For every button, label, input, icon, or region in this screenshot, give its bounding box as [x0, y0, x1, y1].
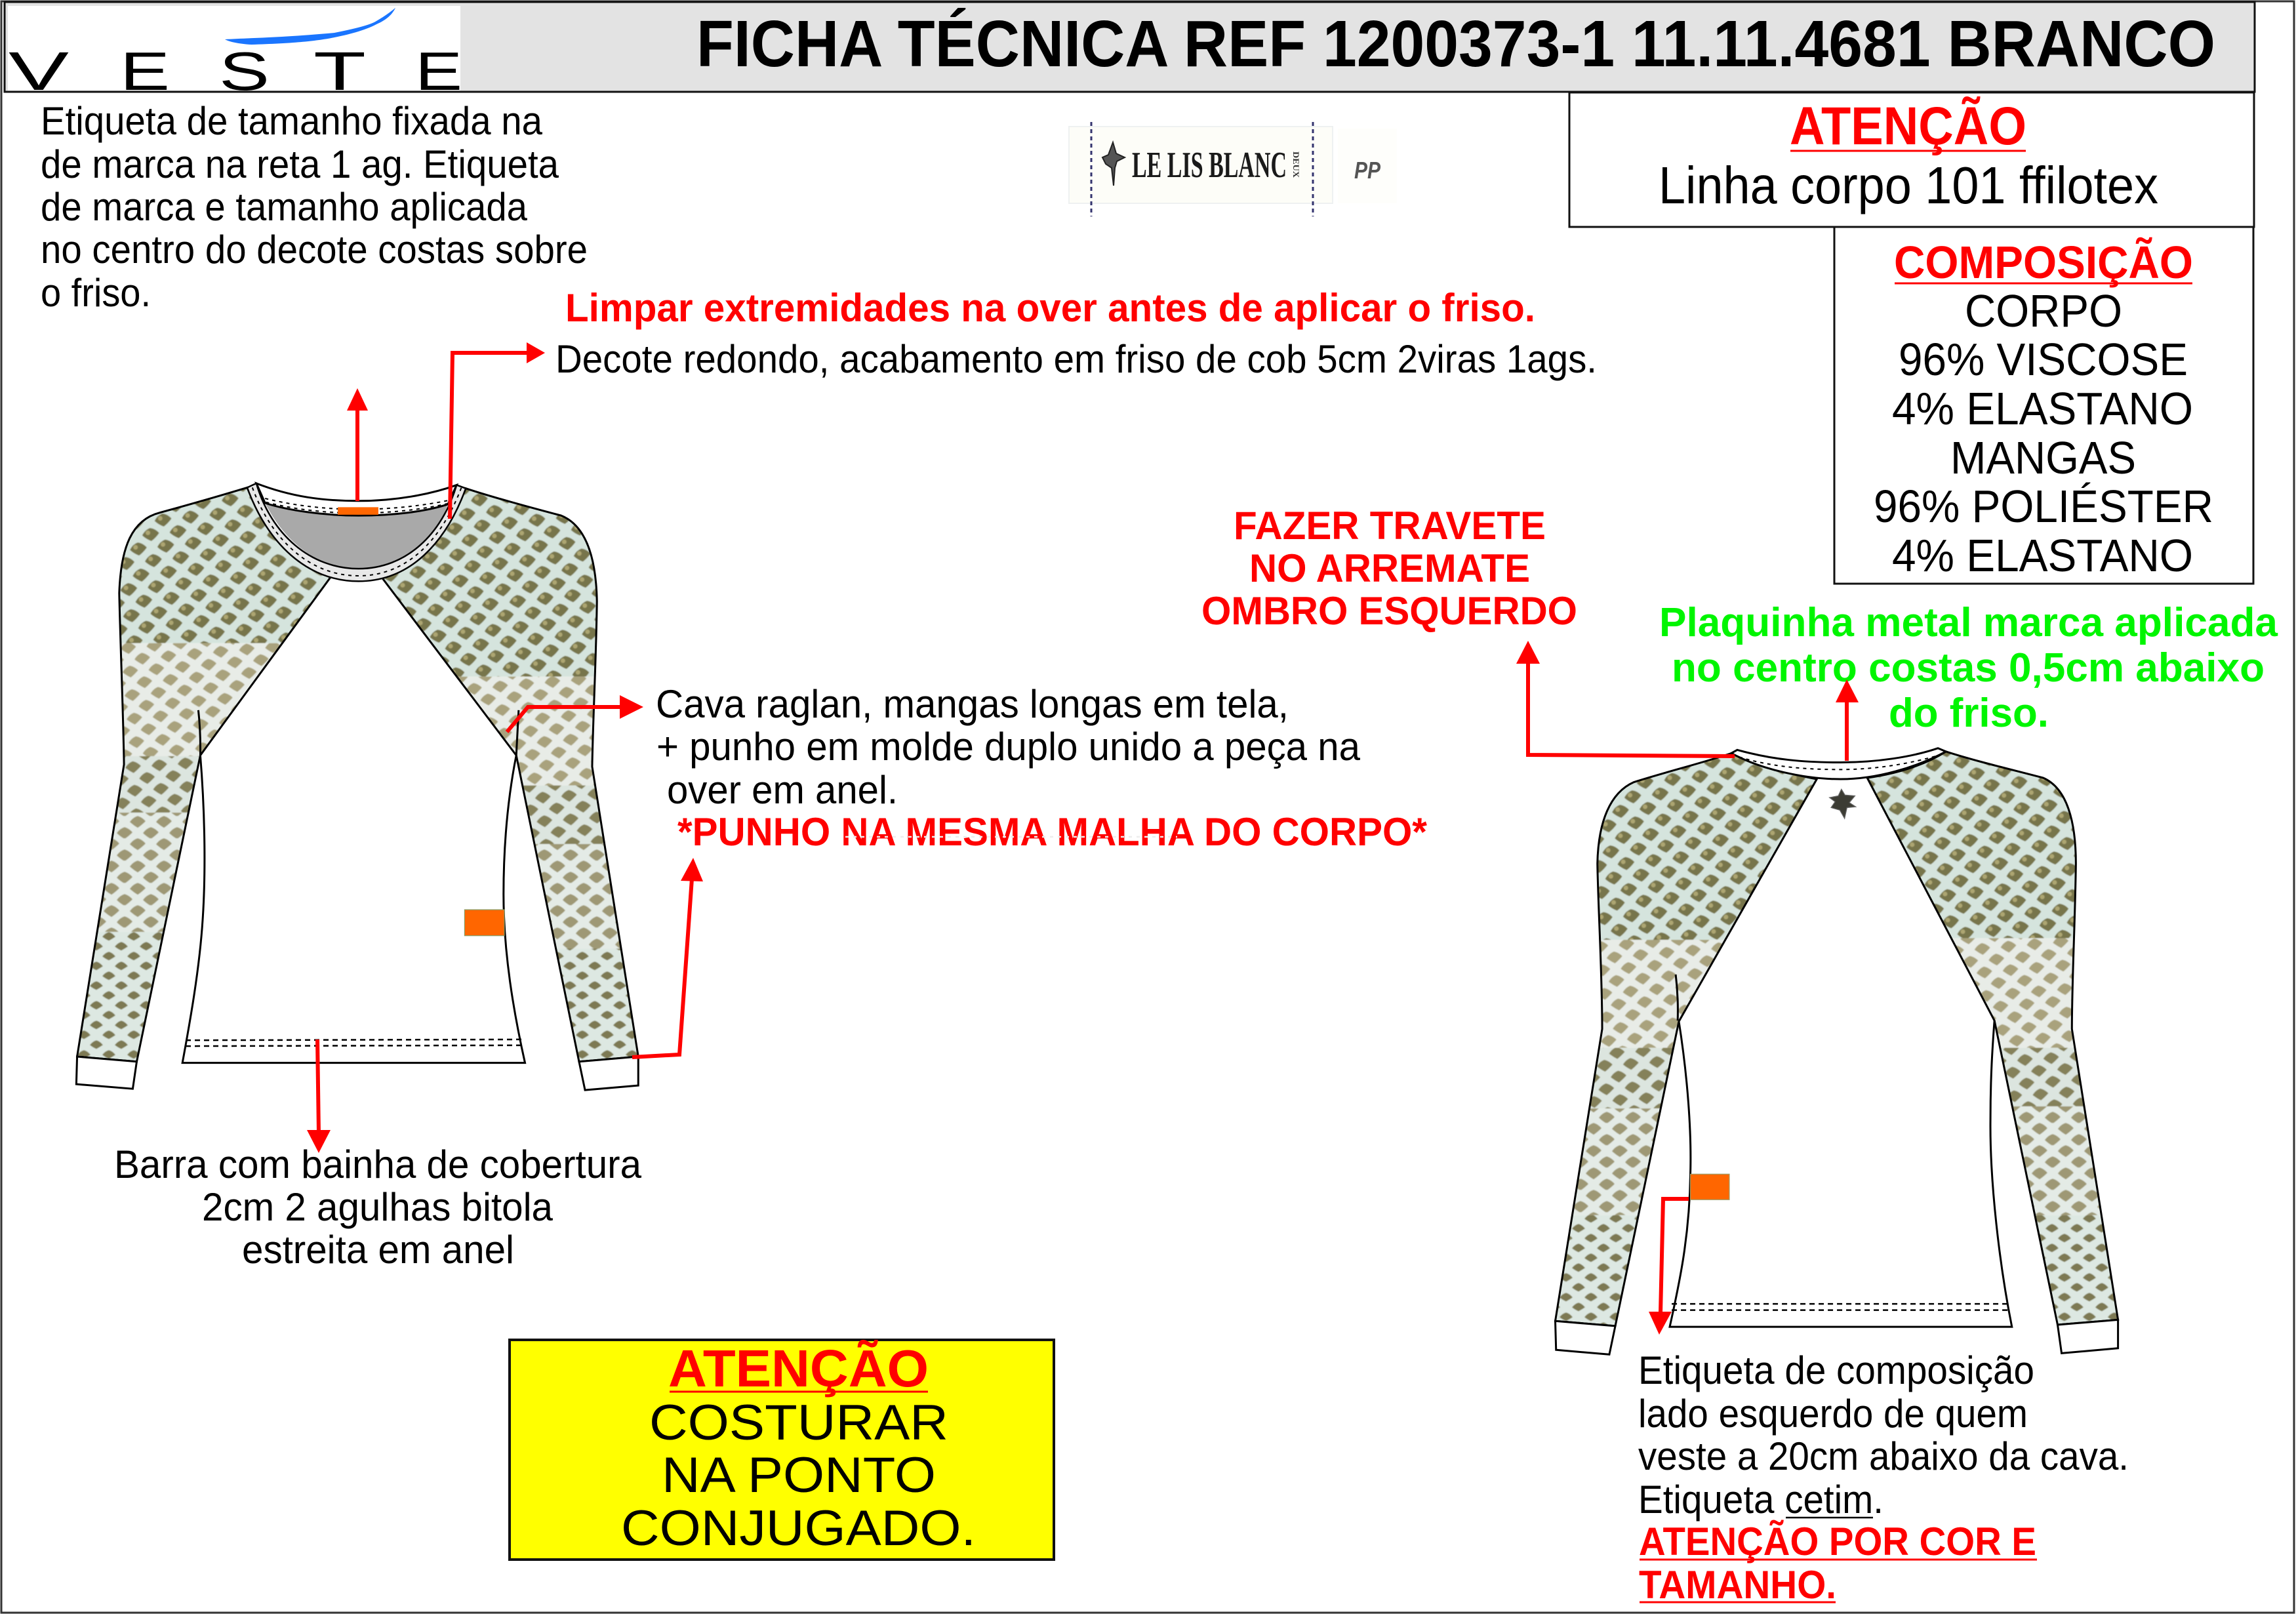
arrow: fazer travete [1516, 641, 1735, 756]
text block: size label note: Etiqueta de tamanho fixada na [41, 99, 543, 143]
neck interior [265, 503, 448, 569]
panel: composição [1834, 227, 2253, 584]
red note: limpar extremidades: Limpar extremidades na over antes de aplicar o friso. [565, 286, 1535, 330]
text block: size label note: no centro do decote costas sobre [41, 228, 588, 272]
header band [5, 2, 2255, 92]
hem stitching [186, 1039, 523, 1046]
text block: size label note: de marca e tamanho aplicada [41, 185, 528, 229]
right cuff [579, 1057, 638, 1090]
panel: atenção linha corpo: ATENÇÃO [1790, 96, 2026, 156]
green note: plaquinha metal: no centro costas 0,5cm abaixo [1672, 645, 2265, 691]
right sleeve [382, 487, 639, 1062]
text block: size label note [41, 99, 588, 315]
back right cuff [2057, 1320, 2118, 1353]
green note: plaquinha metal: Plaquinha metal marca aplicada [1659, 600, 2278, 645]
title: FICHA TÉCNICA REF 1200373-1 11.11.4681 BRANCO [696, 7, 2215, 81]
arrow: cava raglan [507, 695, 643, 732]
back collar [1731, 748, 1946, 779]
text block: etiqueta de composição: veste a 20cm abaixo da cava. [1638, 1434, 2129, 1478]
red note: fazer travete: OMBRO ESQUERDO [1201, 589, 1577, 633]
red note: punho: *PUNHO NA MESMA MALHA DO CORPO* [677, 810, 1428, 854]
red note: fazer travete: FAZER TRAVETE [1234, 504, 1546, 548]
red note: fazer travete: NO ARREMATE [1249, 546, 1530, 590]
callout: atenção costurar: CONJUGADO. [621, 1501, 976, 1556]
text block: cava raglan: + punho em molde duplo unido a peça na [656, 725, 1361, 769]
text block: etiqueta de composição: lado esquerdo de quem [1638, 1392, 2028, 1436]
text block: etiqueta de composição: Etiqueta de composição [1638, 1348, 2034, 1392]
text block: etiqueta de composição: ATENÇÃO POR COR E [1639, 1520, 2036, 1564]
back left sleeve [1554, 752, 1818, 1327]
neck back band [256, 483, 456, 515]
panel: atenção linha corpo [1569, 92, 2254, 227]
panel: composição: 96% VISCOSE [1899, 334, 2188, 385]
callout: atenção costurar [510, 1339, 1054, 1560]
green note: plaquinha metal [1659, 600, 2278, 736]
logo: Veste: V [9, 41, 69, 102]
text block: barra [114, 1142, 642, 1272]
arrow: hem [307, 1039, 331, 1153]
logo: Veste [8, 6, 462, 102]
red note: fazer travete [1201, 504, 1577, 633]
text block: cava raglan: Cava raglan, mangas longas em tela, [656, 682, 1289, 726]
brand label: Le Lis Blanc: LE LIS BLANC [1132, 145, 1287, 186]
panel: atenção linha corpo: Linha corpo 101 ffilotex [1659, 156, 2158, 214]
brand label: Le Lis Blanc: DEUX [1291, 151, 1301, 178]
callout: atenção costurar: COSTURAR [649, 1395, 948, 1451]
back hem stitching [1672, 1304, 2009, 1310]
brand label: Le Lis Blanc [1069, 122, 1397, 216]
text: decote: Decote redondo, acabamento em friso de cob 5cm 2viras 1ags. [555, 337, 1597, 381]
back body outline [1670, 975, 2012, 1327]
panel: composição: 4% ELASTANO [1892, 383, 2193, 434]
arrow: punho [632, 858, 703, 1057]
arrow: plaquinha [1836, 679, 1859, 761]
back right sleeve [1866, 750, 2120, 1326]
left cuff [76, 1057, 136, 1089]
logo: Veste: T [313, 41, 366, 102]
panel: composição: 96% POLIÉSTER [1874, 481, 2213, 532]
composition label front [464, 910, 504, 936]
text block: size label note: o friso. [41, 271, 151, 315]
collar rib [247, 483, 466, 581]
panel: composição: CORPO [1965, 285, 2122, 336]
logo: Veste: S [219, 41, 270, 102]
arrow: composition label [1649, 1199, 1689, 1335]
metal plate star [1830, 789, 1856, 818]
callout: atenção costurar: ATENÇÃO [668, 1339, 929, 1398]
arrow: neck label up [347, 388, 368, 501]
text block: cava raglan: over em anel. [667, 768, 898, 812]
back left cuff [1556, 1321, 1615, 1354]
logo: Veste: E [415, 41, 462, 102]
logo: Veste: E [120, 41, 170, 102]
text block: barra: estreita em anel [242, 1228, 514, 1272]
callout: atenção costurar: NA PONTO [662, 1447, 936, 1503]
garment: front view [52, 476, 668, 1090]
left sleeve [76, 487, 331, 1062]
neck size label [338, 507, 378, 515]
green note: plaquinha metal: do friso. [1889, 691, 2049, 736]
arrow: decote [450, 342, 545, 519]
panel: composição: MANGAS [1950, 432, 2136, 483]
text block: etiqueta de composição: Etiqueta cetim. [1638, 1478, 1883, 1522]
composition label back [1691, 1174, 1729, 1200]
text block: etiqueta de composição: TAMANHO. [1639, 1563, 1836, 1607]
brand label: Le Lis Blanc: PP [1354, 157, 1381, 184]
panel: composição: 4% ELASTANO [1892, 530, 2193, 581]
text block: barra: Barra com bainha de cobertura [114, 1142, 642, 1186]
text block: etiqueta de composição [1638, 1348, 2129, 1607]
text block: size label note: de marca na reta 1 ag. Etiqueta [41, 142, 559, 186]
garment: back view [1535, 746, 2150, 1354]
body outline [182, 710, 525, 1063]
panel: composição: COMPOSIÇÃO [1894, 237, 2193, 288]
text block: cava raglan [656, 682, 1361, 812]
text block: barra: 2cm 2 agulhas bitola [202, 1185, 554, 1229]
